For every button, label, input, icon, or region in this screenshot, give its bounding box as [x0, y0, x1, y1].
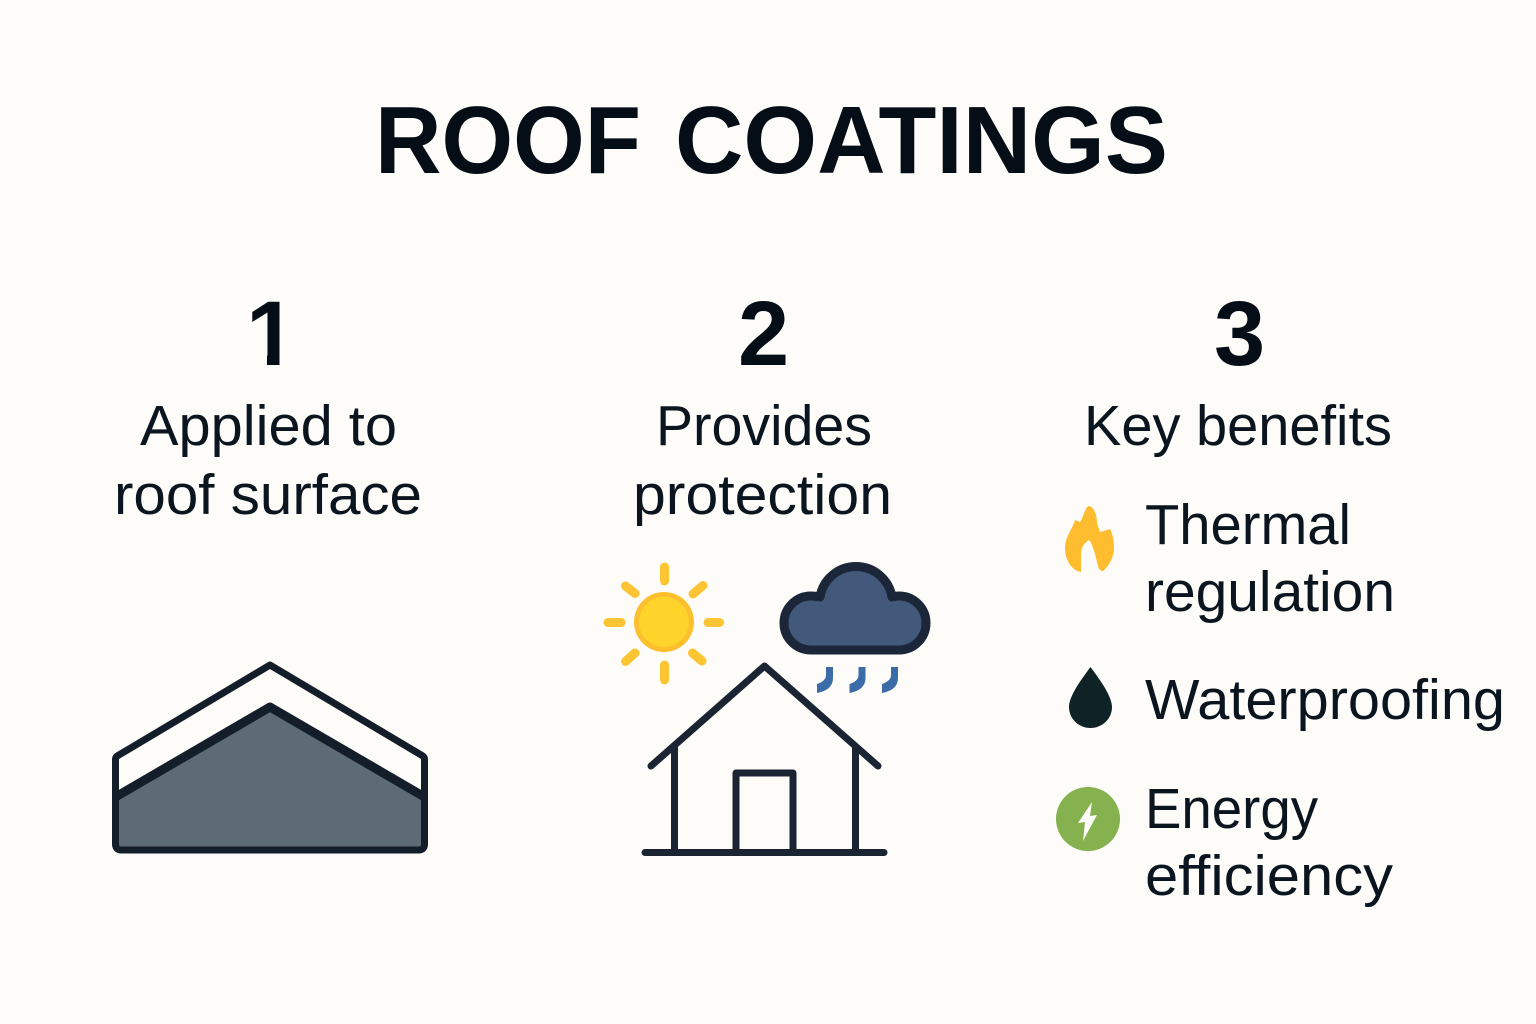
- step 2 heading: protection: [633, 463, 892, 527]
- icon: water drop: [1069, 667, 1112, 728]
- icon: energy bolt badge: [1056, 787, 1120, 851]
- title: ROOF: [375, 87, 641, 194]
- benefit: thermal regulation: [1065, 493, 1395, 624]
- label: energy efficiency: Energy: [1145, 777, 1318, 841]
- step 1 heading: [114, 394, 422, 527]
- step 3 heading: Key benefits: [1084, 394, 1392, 458]
- panel: step 3 key benefits: [1056, 283, 1505, 908]
- panel: step 1 applied to roof surface: [114, 283, 424, 850]
- step number 3: 3: [1214, 283, 1265, 385]
- step 1 heading: Applied to: [140, 394, 397, 458]
- label: energy efficiency: [1145, 777, 1394, 908]
- step number 2: 2: [738, 283, 789, 385]
- step 2 heading: Provides: [656, 394, 872, 458]
- title: COATINGS: [675, 87, 1168, 194]
- step number 1: 1: [246, 283, 297, 385]
- label: waterproofing: Waterproofing: [1145, 668, 1505, 732]
- icon: sun: [608, 567, 720, 680]
- icon: flame: [1065, 506, 1114, 572]
- benefit: waterproofing: [1069, 667, 1505, 732]
- benefit: energy efficiency: [1056, 777, 1394, 908]
- label: energy efficiency: efficiency: [1145, 844, 1394, 908]
- step 1 heading: roof surface: [114, 463, 422, 527]
- icon: rain cloud: [784, 567, 926, 693]
- icon: coated roof cross-section: [116, 665, 424, 850]
- label: thermal regulation: Thermal: [1145, 493, 1351, 557]
- label: thermal regulation: [1145, 493, 1395, 624]
- icon: house: [645, 666, 884, 852]
- panel: step 2 provides protection: [608, 283, 926, 852]
- title: [375, 87, 1168, 194]
- step 2 heading: [633, 394, 892, 527]
- label: thermal regulation: regulation: [1145, 560, 1395, 624]
